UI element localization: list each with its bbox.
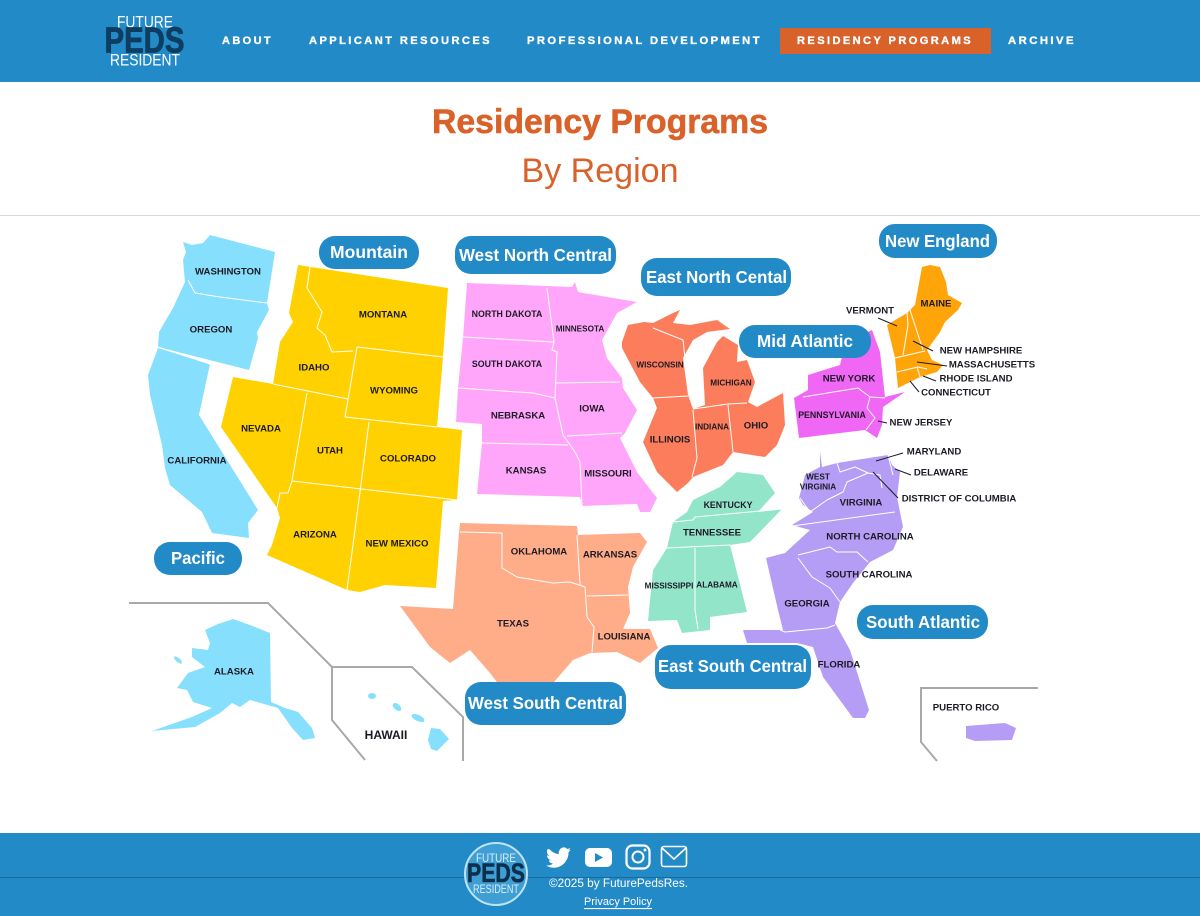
navigation: APPLICANT RESOURCES: [309, 35, 492, 47]
pill: Mid Atlantic: [739, 325, 871, 358]
pill: East North Cental: [641, 258, 791, 296]
region: East North Central: WISCONSIN: [636, 360, 684, 370]
region: East North Central: OHIO: [744, 420, 769, 432]
navigation: [222, 28, 1076, 54]
region: East South Central: TENNESSEE: [683, 528, 742, 538]
region: Mountain: WYOMING: [370, 386, 418, 396]
privacy policy link: Privacy Policy: [584, 896, 652, 908]
region: South Atlantic: [743, 446, 1016, 741]
region: Mid Atlantic: NEW JERSEY: [890, 418, 953, 428]
region: South Atlantic: FLORIDA: [818, 660, 860, 670]
region: New England: CONNECTICUT: [921, 388, 991, 398]
region: South Atlantic: SOUTH CAROLINA: [826, 570, 913, 580]
region: South Atlantic: MARYLAND: [907, 446, 961, 458]
region: South Atlantic: DISTRICT OF COLUMBIA: [902, 494, 1016, 504]
region: East South Central: MISSISSIPPI: [645, 582, 693, 590]
icon: youtube: [585, 848, 612, 867]
inset frames: [129, 603, 1038, 761]
footer logo: FUTURE: [476, 851, 516, 865]
title: [432, 103, 768, 190]
region: New England: [846, 265, 1036, 398]
region: New England: VERMONT: [846, 306, 894, 316]
region: Mountain: COLORADO: [380, 454, 437, 464]
footer logo: PEDS: [467, 858, 525, 888]
region: East North Central: [622, 310, 785, 492]
region: West North Central: MINNESOTA: [556, 324, 604, 334]
pill: West North Central: West North Central: [459, 245, 612, 265]
navigation: RESIDENCY PROGRAMS: [797, 35, 973, 47]
icon: mail: [662, 846, 686, 866]
pill: Mid Atlantic: Mid Atlantic: [757, 331, 853, 351]
region: West North Central: KANSAS: [506, 466, 547, 476]
region: South Atlantic: PUERTO RICO: [933, 702, 1000, 714]
pill: South Atlantic: South Atlantic: [866, 612, 980, 632]
pill: New England: New England: [885, 231, 990, 251]
region: East South Central: [645, 472, 782, 633]
region: Mountain: [221, 265, 462, 592]
region: New England: MASSACHUSETTS: [949, 360, 1036, 370]
region: Mid Atlantic: NEW YORK: [823, 374, 875, 384]
navigation: ARCHIVE: [1008, 35, 1076, 47]
header bar: [0, 0, 1200, 82]
region: East North Central: ILLINOIS: [650, 434, 691, 446]
region: East South Central: ALABAMA: [696, 580, 738, 590]
region: West North Central: MISSOURI: [584, 468, 632, 480]
logo: FUTURE: [117, 12, 173, 32]
region: South Atlantic: VIRGINIA: [800, 482, 836, 492]
region: West South Central: OKLAHOMA: [511, 546, 567, 558]
region: Mid Atlantic: [794, 330, 953, 438]
region: Mountain: IDAHO: [299, 362, 330, 374]
region: Mountain: NEW MEXICO: [366, 538, 429, 550]
region: Pacific: ALASKA: [214, 666, 254, 678]
region: South Atlantic: GEORGIA: [784, 598, 830, 610]
region: New England: RHODE ISLAND: [939, 374, 1013, 384]
pill: South Atlantic: [857, 605, 988, 639]
region: West North Central: IOWA: [579, 404, 605, 414]
navigation: ABOUT: [222, 35, 273, 47]
footer: [0, 833, 1200, 916]
navigation: PROFESSIONAL DEVELOPMENT: [527, 35, 762, 47]
logo: [104, 12, 184, 70]
region: East South Central: KENTUCKY: [704, 500, 753, 510]
region: New England: MAINE: [921, 298, 952, 310]
icon: twitter: [546, 847, 571, 868]
pill: New England: [879, 224, 997, 258]
pill: Mountain: [319, 236, 419, 269]
footer logo: RESIDENT: [473, 882, 519, 896]
region: West South Central: LOUISIANA: [598, 632, 650, 642]
pill: Pacific: [154, 542, 242, 575]
logo: PEDS: [104, 20, 184, 60]
region: South Atlantic: DELAWARE: [914, 468, 969, 478]
logo: RESIDENT: [110, 50, 180, 70]
region: Mountain: UTAH: [317, 446, 343, 456]
region: West North Central: NORTH DAKOTA: [472, 309, 543, 319]
region: South Atlantic: NORTH CAROLINA: [826, 532, 914, 542]
region: East North Central: MICHIGAN: [710, 378, 752, 388]
region: South Atlantic: VIRGINIA: [840, 498, 882, 508]
pill: East South Central: [655, 645, 811, 689]
region: Mountain: NEVADA: [241, 424, 281, 434]
region: Pacific: HAWAII: [365, 728, 407, 742]
region: Pacific: WASHINGTON: [195, 266, 261, 278]
pill: East North Cental: East North Cental: [646, 267, 787, 287]
region: West North Central: [456, 282, 657, 512]
pill: West South Central: West South Central: [468, 693, 623, 713]
pill: East South Central: East South Central: [658, 656, 807, 676]
icon: instagram: [626, 846, 650, 868]
region: West South Central: ARKANSAS: [583, 550, 638, 560]
region: East North Central: INDIANA: [695, 422, 729, 432]
region: West North Central: SOUTH DAKOTA: [472, 359, 543, 369]
title: Residency Programs: [432, 103, 768, 141]
region: Pacific: CALIFORNIA: [167, 456, 227, 466]
region: Mountain: MONTANA: [359, 310, 407, 320]
pill: Mountain: Mountain: [330, 242, 408, 262]
pill: West North Central: [455, 236, 616, 274]
footer logo: [465, 843, 527, 905]
region: New England: NEW HAMPSHIRE: [940, 346, 1023, 356]
title: By Region: [522, 152, 678, 190]
region: West South Central: [400, 523, 658, 690]
pill: West South Central: [465, 682, 626, 725]
copyright: ©2025 by FuturePedsRes.: [549, 878, 688, 890]
pill: Pacific: Pacific: [171, 548, 225, 568]
region: West South Central: TEXAS: [497, 618, 530, 630]
region: Mountain: ARIZONA: [293, 530, 337, 540]
region: Pacific: OREGON: [190, 324, 232, 336]
region: South Atlantic: WEST: [806, 472, 830, 482]
region: Pacific: [148, 235, 449, 751]
region: West North Central: NEBRASKA: [491, 410, 545, 422]
region: Mid Atlantic: PENNSYLVANIA: [798, 410, 866, 420]
